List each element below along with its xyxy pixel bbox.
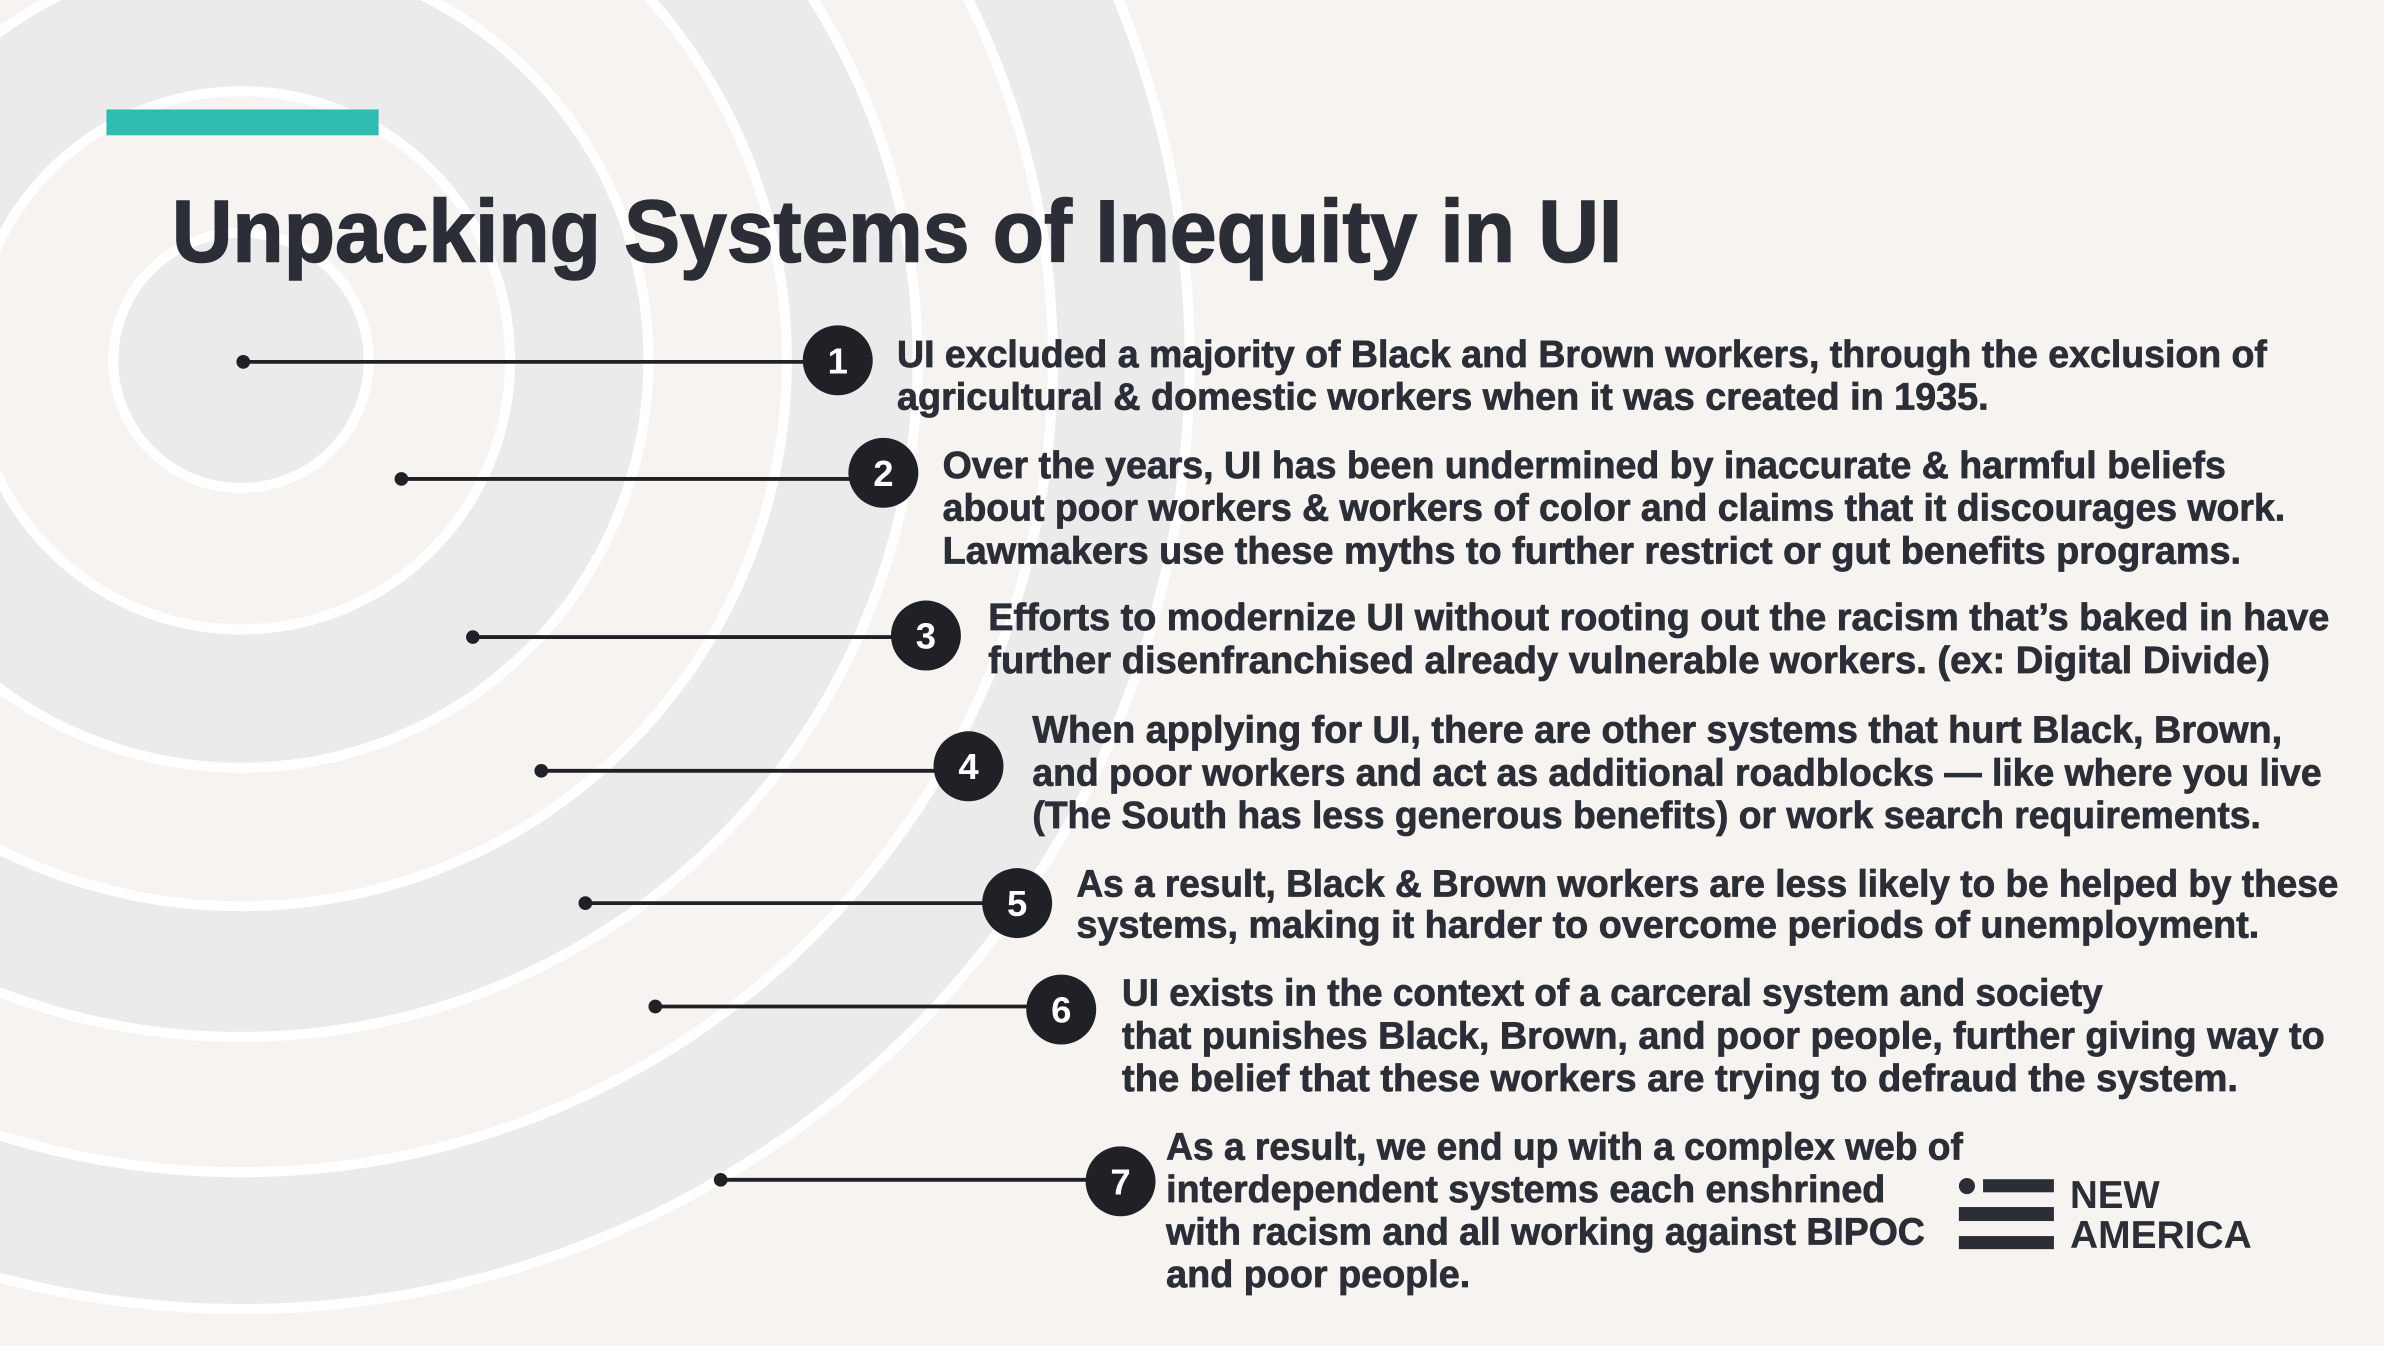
item 5: [579, 863, 2338, 946]
item 7: with racism and all working against BIPOC: [1165, 1211, 1925, 1253]
item 3: Efforts to modernize UI without rooting out the racism that’s baked in have: [988, 597, 2329, 639]
item 7: 7: [1110, 1161, 1131, 1202]
item 6: the belief that these workers are trying to defraud the system.: [1122, 1058, 2238, 1100]
item 2: Over the years, UI has been undermined by inaccurate & harmful beliefs: [943, 445, 2226, 487]
item 1: [236, 325, 2267, 419]
item 3: [466, 597, 2329, 682]
item 4: and poor workers and act as additional roadblocks — like where you live: [1032, 752, 2322, 794]
item 2: about poor workers & workers of color and claims that it discourages work.: [943, 488, 2285, 530]
teal accent bar: [106, 109, 379, 135]
item 7: interdependent systems each enshrined: [1166, 1169, 1885, 1211]
background: concentric rings: [0, 0, 1190, 1309]
item 2: Lawmakers use these myths to further restrict or gut benefits programs.: [943, 530, 2241, 572]
item 2: 2: [873, 453, 894, 494]
item 7: and poor people.: [1166, 1254, 1470, 1296]
item 1: agricultural & domestic workers when it was created in 1935.: [897, 377, 1989, 419]
item 6: [648, 973, 2325, 1100]
title: Unpacking Systems of Inequity in UI: [172, 182, 1622, 281]
item 7: [714, 1126, 1963, 1296]
item 6: UI exists in the context of a carceral system and society: [1122, 973, 2103, 1015]
logo: New America: NEW: [2070, 1174, 2160, 1217]
item 5: 5: [1007, 883, 1027, 924]
item 1: 1: [828, 340, 848, 381]
item 4: When applying for UI, there are other systems that hurt Black, Brown,: [1032, 710, 2282, 752]
item 5: As a result, Black & Brown workers are less likely to be helped by these: [1076, 863, 2338, 905]
item 4: (The South has less generous benefits) or work search requirements.: [1032, 795, 2261, 837]
item 6: 6: [1051, 989, 1071, 1030]
item 5: systems, making it harder to overcome periods of unemployment.: [1076, 904, 2259, 946]
item 3: further disenfranchised already vulnerable workers. (ex: Digital Divide): [988, 640, 2270, 682]
logo: New America: AMERICA: [2070, 1214, 2252, 1257]
logo: New America: [1959, 1174, 2252, 1257]
item 6: that punishes Black, Brown, and poor people, further giving way to: [1122, 1015, 2325, 1057]
item 1: UI excluded a majority of Black and Brown workers, through the exclusion of: [897, 334, 2267, 376]
item 4: 4: [958, 746, 979, 787]
item 4: [534, 710, 2322, 837]
item 2: [395, 438, 2285, 572]
item 7: As a result, we end up with a complex web of: [1166, 1126, 1963, 1168]
item 3: 3: [916, 615, 936, 656]
